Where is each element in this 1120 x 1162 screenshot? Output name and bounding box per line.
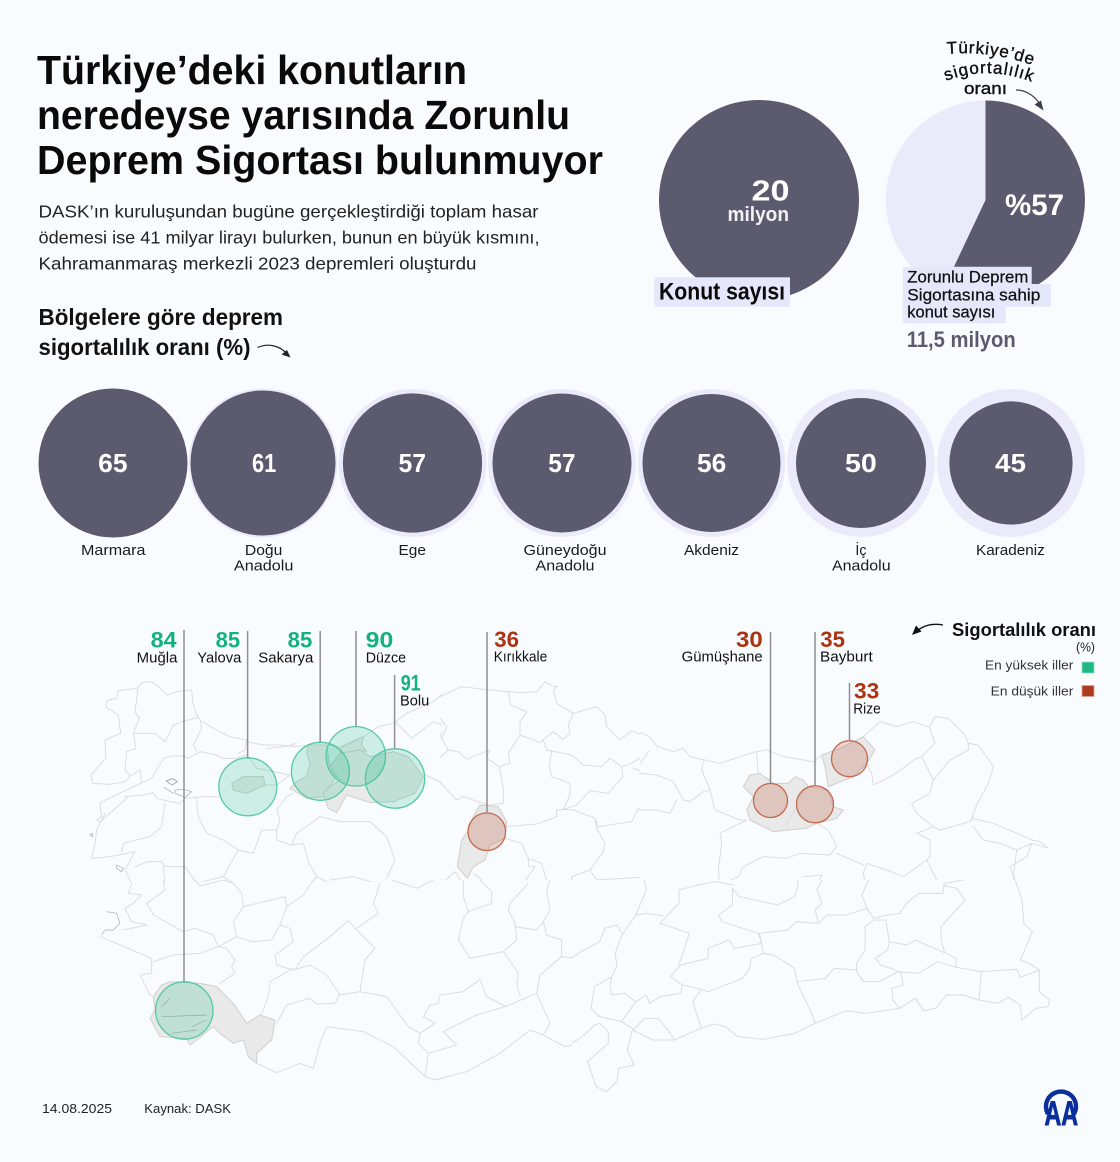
bubble: Güneydoğu Anadolu: Anadolu [536, 558, 594, 574]
bubble: Güneydoğu Anadolu: Güneydoğu [524, 543, 606, 559]
legend: Sigortalılık oranı [952, 620, 1096, 640]
bubble: Karadeniz [937, 389, 1085, 559]
chart: regional bubbles [38, 388, 1085, 574]
regional section heading: sigortalılık oranı (%) [38, 334, 250, 360]
title: Deprem Sigortası bulunmuyor [37, 137, 603, 183]
label: Gümüşhane: Gümüşhane [682, 650, 763, 666]
label: Muğla: Muğla [137, 650, 178, 666]
panel: housing count pie [654, 100, 859, 307]
label: Rize: 33 [854, 678, 879, 704]
southeast provinces [560, 880, 1050, 1092]
label: Muğla [137, 628, 184, 982]
logo: AA [1044, 1092, 1078, 1133]
north central provinces [231, 694, 442, 882]
label: Yalova: Yalova [197, 650, 242, 666]
marker: Düzce circle [326, 727, 385, 786]
label: Sakarya [258, 628, 320, 742]
label: Yalova [197, 628, 248, 758]
arrow: pie label [1016, 90, 1044, 110]
label: Bayburt: Bayburt [820, 650, 873, 666]
label: Rize [850, 678, 881, 741]
bubble: Marmara: Marmara [81, 543, 146, 559]
title: Türkiye’deki konutların [37, 47, 467, 93]
marker: Muğla circle [156, 982, 213, 1039]
marker: Yalova circle [219, 758, 277, 816]
panel: housing count pie: milyon [728, 204, 789, 226]
label: Bayburt: 35 [820, 627, 845, 652]
label: Bayburt [815, 627, 873, 786]
regional section heading [38, 304, 290, 360]
central provinces [440, 681, 640, 880]
bubble: Karadeniz: Karadeniz [976, 543, 1045, 559]
label: Kırıkkale: 36 [494, 627, 519, 652]
bubble: Akdeniz: 56 [697, 448, 726, 478]
panel: insurance rate pie: Sigortasına sahip [907, 286, 1040, 304]
marker: Kırıkkale circle [468, 813, 506, 850]
bubble: İç Anadolu: Anadolu [832, 558, 891, 574]
legend: highest: En yüksek iller [985, 657, 1074, 672]
intro paragraph: ödemesi ise 41 milyar lirayı bulurken, bunun en büyük kısmını, [38, 228, 540, 248]
bubble: Ege: Ege [398, 543, 426, 559]
panel: insurance rate pie: %57 [1005, 189, 1064, 222]
curved label: Türkiye'de sigortalılık oranı: oranı [964, 79, 1007, 98]
bubble: Güneydoğu Anadolu: 57 [548, 448, 576, 478]
bubble: Güneydoğu Anadolu [488, 389, 636, 574]
title [37, 47, 603, 183]
label: Muğla: 84 [151, 628, 177, 652]
source: Kaynak: DASK [144, 1102, 232, 1116]
bubble: Akdeniz: Akdeniz [684, 543, 739, 559]
map: Turkey provinces [90, 682, 1050, 1092]
panel: insurance rate pie [886, 100, 1085, 352]
bubble: Doğu Anadolu: 61 [252, 448, 276, 478]
panel: housing count pie: 20 [752, 176, 790, 208]
label: Düzce [356, 628, 406, 727]
southwest provinces [100, 880, 580, 1080]
label: Sakarya: 85 [288, 628, 312, 652]
date: 14.08.2025 [42, 1102, 112, 1116]
panel: insurance rate pie: Zorunlu Deprem [907, 269, 1028, 287]
panel: housing count pie: Konut sayısı [659, 278, 785, 306]
east provinces [640, 717, 1048, 890]
label: Kırıkkale [487, 627, 547, 813]
bubble: Akdeniz [638, 389, 786, 559]
marker: Bayburt circle [796, 786, 834, 823]
panel: insurance rate pie: 11,5 milyon [907, 327, 1016, 352]
bubble: Doğu Anadolu [188, 388, 338, 574]
label: Bolu [395, 670, 429, 749]
intro paragraph: DASK’ın kuruluşundan bugüne gerçekleştirdiği toplam hasar [38, 202, 539, 222]
curved label: Türkiye'de sigortalılık oranı: Türkiye’de [946, 41, 1034, 64]
label: Gümüşhane: 30 [736, 627, 763, 652]
label: Bolu: Bolu [400, 693, 429, 709]
panel: insurance rate pie: konut sayısı [907, 304, 995, 322]
label: Kırıkkale: Kırıkkale [494, 650, 547, 666]
bubble: Karadeniz: 45 [995, 448, 1026, 478]
bubble: İç Anadolu: İç [855, 541, 866, 559]
intro paragraph [38, 202, 540, 274]
bubble: Ege [338, 389, 486, 559]
legend: lowest: En düşük iller [991, 683, 1074, 698]
marker: Bolu circle [365, 749, 425, 808]
bubble: Doğu Anadolu: Doğu [245, 543, 282, 559]
bubble: İç Anadolu: 50 [845, 448, 877, 478]
marker: Sakarya circle [291, 742, 349, 800]
curved label: Türkiye'de sigortalılık oranı: sigortalılık [944, 62, 1035, 82]
intro paragraph: Kahramanmaraş merkezli 2023 depremleri oluşturdu [38, 254, 476, 274]
title: neredeyse yarısında Zorunlu [37, 92, 570, 138]
legend: (%) [1076, 640, 1095, 655]
label: Rize: Rize [853, 701, 881, 717]
bubble: Marmara: 65 [98, 448, 128, 478]
regional section heading: Bölgelere göre deprem [38, 304, 283, 330]
legend [912, 620, 1096, 698]
west provinces [90, 681, 328, 882]
marker: Rize circle [832, 741, 868, 777]
bubble: Ege: 57 [398, 448, 426, 478]
label: Yalova: 85 [216, 628, 240, 652]
label: Düzce: 90 [366, 628, 393, 652]
label: Sakarya: Sakarya [258, 650, 314, 666]
label: Bolu: 91 [401, 670, 421, 696]
logo: AA: AA [1044, 1095, 1078, 1133]
bubble: Doğu Anadolu: Anadolu [234, 558, 293, 574]
label: Düzce: Düzce [366, 650, 406, 666]
bubble: İç Anadolu [787, 389, 935, 574]
curved label: Türkiye'de sigortalılık oranı [944, 41, 1035, 98]
label: Gümüşhane [682, 627, 770, 783]
bubble: Marmara [38, 388, 188, 559]
marker: Gümüşhane circle [754, 784, 788, 818]
